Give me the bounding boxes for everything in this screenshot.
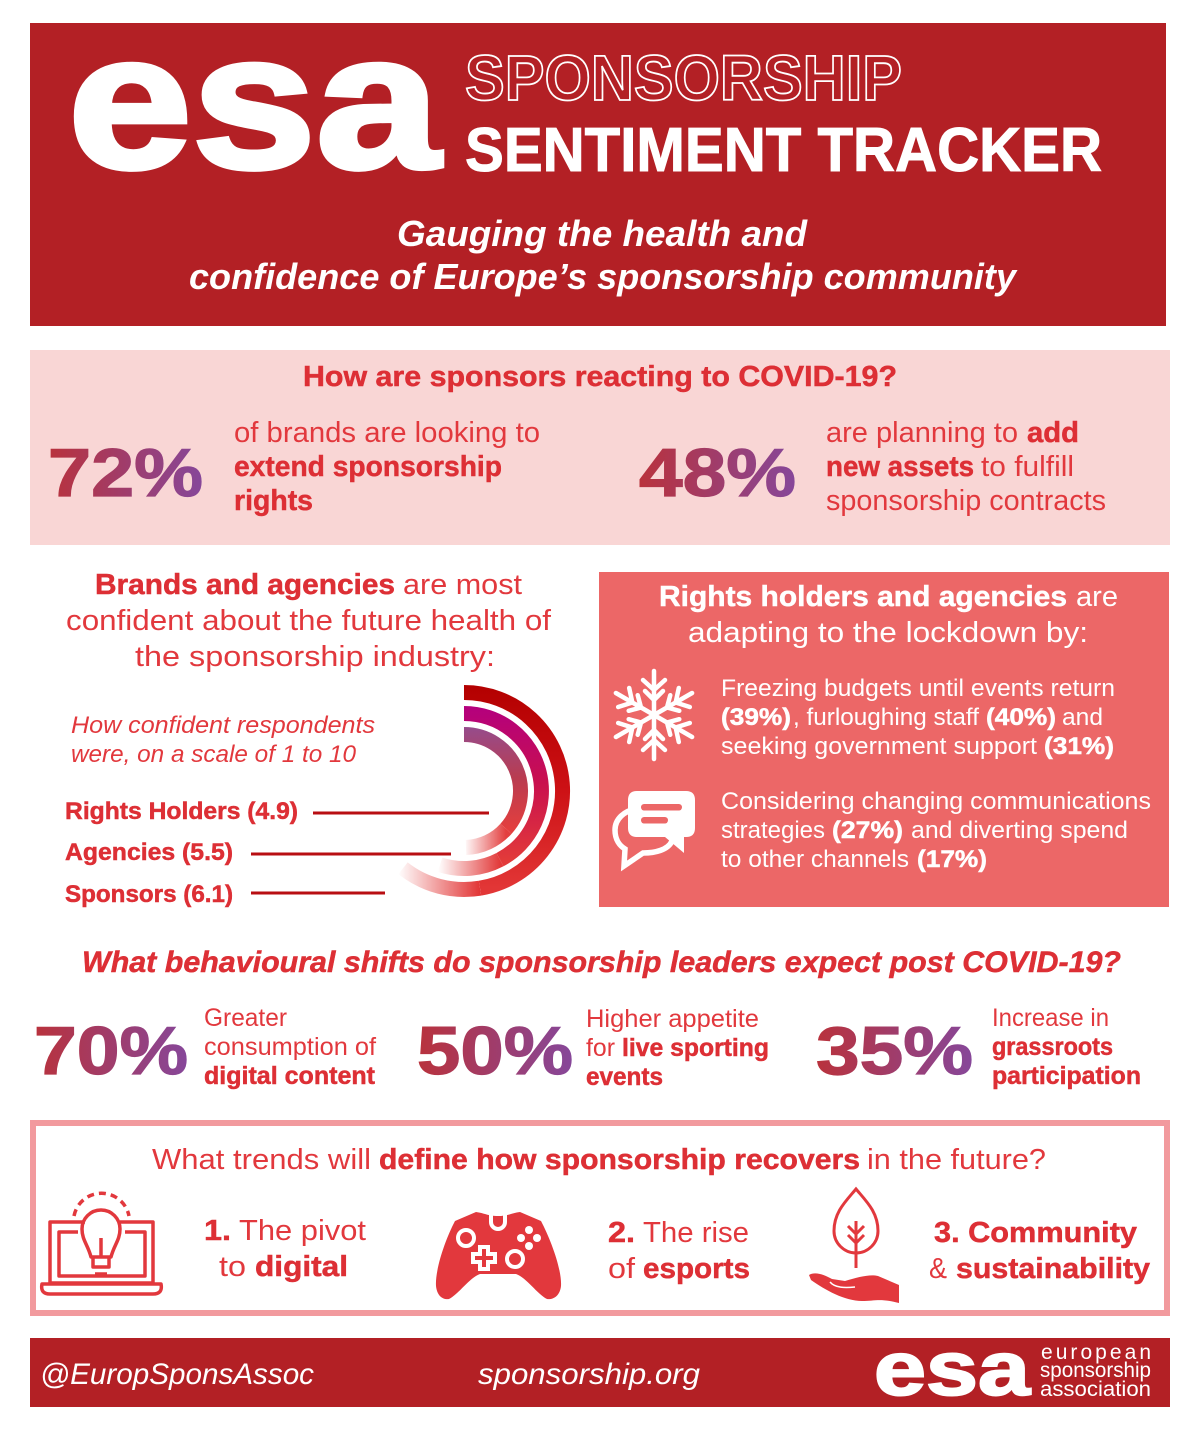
stat: 70% digital content: 70% bbox=[34, 1013, 188, 1089]
text: community and sustainability bbox=[929, 1217, 1150, 1285]
text: freezing budgets: (39%) bbox=[721, 704, 791, 731]
stat: 50% live sporting events: Higher appetite bbox=[586, 1005, 759, 1033]
chart: confidence radial bars bbox=[65, 692, 563, 908]
ring: rights holders bbox=[464, 734, 521, 848]
text: rise of esports: of bbox=[608, 1253, 636, 1285]
text: pivot to digital bbox=[204, 1215, 366, 1283]
stat: 35% grassroots participation: participation bbox=[992, 1062, 1141, 1090]
text: communications strategies: (27%) bbox=[832, 817, 903, 844]
subtitle bbox=[189, 213, 1018, 297]
stat: 35% grassroots participation: Increase in bbox=[992, 1004, 1109, 1032]
text: freezing budgets: and bbox=[1062, 704, 1103, 731]
text: freezing budgets bbox=[721, 675, 1115, 760]
text: add new assets bbox=[826, 417, 1106, 517]
text: rise of esports: The rise bbox=[643, 1217, 749, 1249]
text: communications strategies: (17%) bbox=[917, 846, 987, 873]
text: freezing budgets: Freezing budgets until events return bbox=[721, 675, 1115, 702]
panel: header banner bbox=[30, 0, 1166, 326]
text block: brands and agencies confidence: are most bbox=[403, 569, 522, 601]
text: community and sustainability: & bbox=[929, 1253, 947, 1285]
panel: rights holders adapting bbox=[599, 572, 1169, 907]
label: agencies: Agencies (5.5) bbox=[65, 839, 233, 866]
text: add new assets: new assets bbox=[826, 451, 974, 483]
text: communications strategies: to other channels bbox=[721, 846, 909, 873]
text block: brands and agencies confidence bbox=[66, 569, 552, 673]
text: rise of esports: esports bbox=[643, 1253, 750, 1285]
stat: 50% live sporting events: live sporting bbox=[622, 1034, 769, 1062]
footer: ESA logo: esa bbox=[874, 1327, 1031, 1412]
chart note bbox=[71, 712, 375, 768]
label: agencies bbox=[65, 839, 451, 866]
text: pivot to digital: digital bbox=[255, 1251, 348, 1283]
text block: brands and agencies confidence: Brands and agencies bbox=[95, 569, 395, 601]
icon: game controller bbox=[436, 1212, 561, 1299]
stat: 50% live sporting events bbox=[417, 1005, 769, 1091]
text: communications strategies: strategies bbox=[721, 817, 825, 844]
ring: agencies bbox=[440, 714, 541, 868]
icon: laptop with light bulb bbox=[42, 1193, 161, 1294]
stat: 72%: 72% bbox=[48, 435, 203, 511]
stat: 35% grassroots participation: grassroots bbox=[992, 1033, 1113, 1061]
footer: logo wordmark: sponsorship bbox=[1040, 1359, 1151, 1382]
stat: 70% digital content: consumption of bbox=[204, 1033, 376, 1061]
panel: how sponsors are reacting bbox=[30, 350, 1170, 545]
ring: sponsors bbox=[403, 692, 563, 890]
text: extend sponsorship rights: rights bbox=[234, 485, 313, 517]
footer: website: sponsorship.org bbox=[478, 1358, 700, 1391]
stat: 35% grassroots participation: 35% bbox=[816, 1013, 973, 1089]
section heading: How are sponsors reacting to COVID-19? bbox=[303, 361, 897, 393]
text: community and sustainability: 3. Community bbox=[934, 1217, 1137, 1249]
panel heading: What trends will bbox=[152, 1144, 371, 1176]
stat: 50% live sporting events: for bbox=[586, 1034, 615, 1062]
footer: logo wordmark: association bbox=[1040, 1378, 1151, 1401]
panel heading: adapting to the lockdown by: bbox=[688, 617, 1088, 649]
text: freezing budgets: (31%) bbox=[1044, 733, 1114, 760]
subtitle: confidence of Europe’s sponsorship community bbox=[189, 256, 1018, 297]
stat: 50% live sporting events: 50% bbox=[417, 1013, 573, 1089]
footer: twitter handle: @EuropSponsAssoc bbox=[40, 1358, 314, 1391]
text: extend sponsorship rights: extend sponsorship bbox=[234, 451, 502, 483]
text: communications strategies: Considering changing communications bbox=[721, 788, 1151, 815]
text: extend sponsorship rights bbox=[234, 417, 540, 517]
title line: sponsorship: SPONSORSHIP bbox=[465, 42, 902, 114]
text: communications strategies bbox=[721, 788, 1151, 873]
panel heading: Rights holders and agencies bbox=[659, 581, 1067, 613]
stat: 35% grassroots participation bbox=[816, 1004, 1141, 1090]
icon: snowflake bbox=[610, 671, 698, 759]
panel: footer bbox=[30, 1327, 1170, 1412]
text: extend sponsorship rights: of brands are looking to bbox=[234, 417, 540, 449]
panel heading: define how sponsorship recovers bbox=[379, 1144, 860, 1176]
footer: logo wordmark bbox=[1040, 1341, 1151, 1401]
stat: 50% live sporting events: events bbox=[586, 1063, 663, 1091]
panel heading: in the future? bbox=[867, 1144, 1046, 1176]
text block: brands and agencies confidence: confident about the future health of bbox=[66, 605, 552, 637]
text: communications strategies: and diverting spend bbox=[911, 817, 1128, 844]
footer: logo wordmark: european bbox=[1041, 1341, 1151, 1364]
label: sponsors: Sponsors (6.1) bbox=[65, 881, 233, 908]
text: add new assets: sponsorship contracts bbox=[826, 485, 1106, 517]
chart note: How confident respondents bbox=[71, 712, 375, 739]
text: add new assets: add bbox=[1027, 417, 1079, 449]
chart note: were, on a scale of 1 to 10 bbox=[71, 741, 357, 768]
label: rights holders bbox=[65, 798, 489, 825]
panel: future trends bbox=[33, 1123, 1167, 1313]
text: freezing budgets: seeking government support bbox=[721, 733, 1037, 760]
text: pivot to digital: to bbox=[219, 1251, 246, 1283]
label: rights holders: Rights Holders (4.9) bbox=[65, 798, 298, 825]
panel heading bbox=[659, 581, 1118, 649]
text: add new assets: are planning to bbox=[826, 417, 1018, 449]
text: community and sustainability: sustainability bbox=[956, 1253, 1150, 1285]
stat: 70% digital content: Greater bbox=[204, 1004, 287, 1032]
stat: 70% digital content bbox=[34, 1004, 376, 1090]
icon: leaf and hand bbox=[809, 1189, 899, 1303]
text: pivot to digital: 1. bbox=[204, 1215, 231, 1247]
stat: 48%: 48% bbox=[639, 435, 796, 511]
panel heading: are bbox=[1076, 581, 1118, 613]
text: rise of esports bbox=[608, 1217, 750, 1285]
icon: chat bubbles bbox=[615, 791, 695, 866]
text: add new assets: to fulfill bbox=[981, 451, 1074, 483]
heading: behavioural shifts: What behavioural shifts do sponsorship leaders expect post COVID-19? bbox=[82, 946, 1121, 979]
text: rise of esports: 2. bbox=[608, 1217, 635, 1249]
title line: sentiment tracker: SENTIMENT TRACKER bbox=[465, 116, 1102, 185]
text: pivot to digital: The pivot bbox=[239, 1215, 366, 1247]
text: freezing budgets: , furloughing staff bbox=[793, 704, 979, 731]
panel heading bbox=[152, 1144, 1046, 1176]
text block: brands and agencies confidence: the sponsorship industry: bbox=[135, 641, 495, 673]
label: sponsors bbox=[65, 881, 385, 908]
subtitle: Gauging the health and bbox=[397, 213, 808, 254]
stat: 70% digital content: digital content bbox=[204, 1062, 376, 1090]
text: freezing budgets: (40%) bbox=[986, 704, 1056, 731]
